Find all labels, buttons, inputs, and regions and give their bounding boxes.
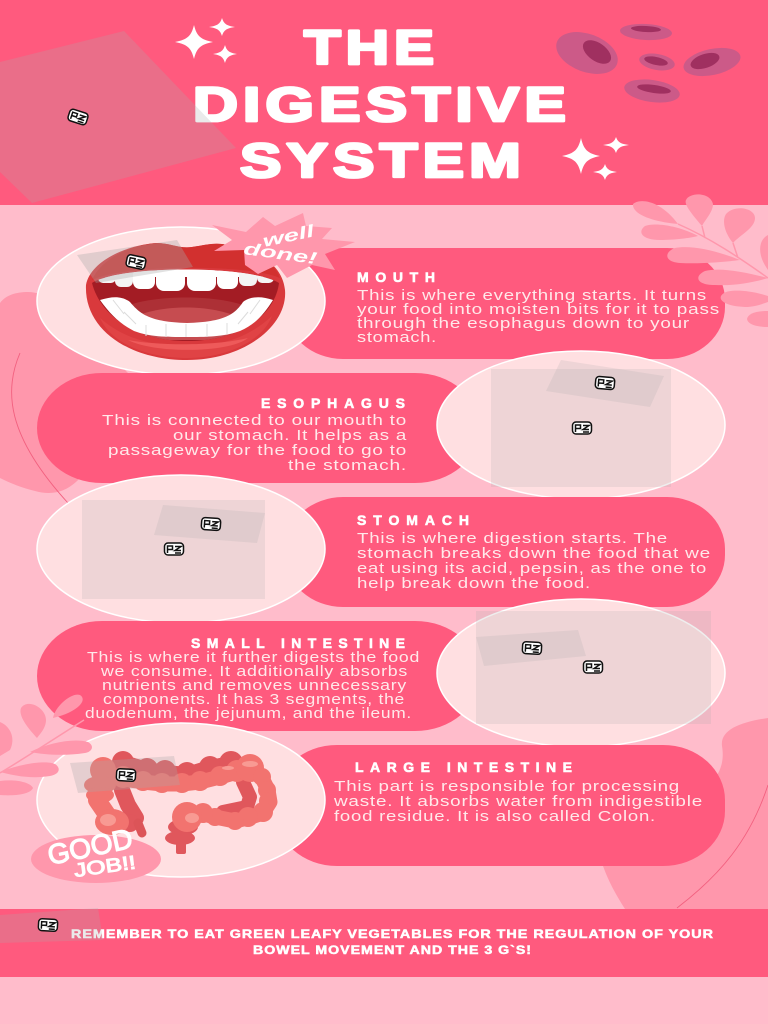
large intestine image circle [37, 723, 325, 877]
footer message [71, 929, 714, 957]
mouth heading: MOUTH [357, 269, 435, 285]
large intestine text pill [275, 745, 725, 866]
stomach description [357, 531, 711, 592]
small intestine text pill [37, 621, 480, 731]
colon dark back layer [123, 764, 231, 776]
illustration: mouth [86, 243, 285, 360]
badge: good job: GOOD [45, 823, 135, 871]
title [193, 22, 571, 188]
small intestine description: This is where it further digests the food [87, 650, 420, 666]
placeholder: mouth image [77, 240, 193, 283]
title: THE [304, 22, 439, 75]
decorative blob: left [0, 292, 140, 503]
stomach description: eat using its acid, pepsin, as the one to [357, 561, 707, 577]
small intestine description: duodenum, the jejunum, and the ileum. [85, 706, 412, 722]
title: SYSTEM [240, 135, 526, 188]
badge: good job: JOB!! [73, 853, 137, 882]
mouth description: This is where everything starts. It turns [357, 288, 707, 304]
mouth description: through the esophagus down to your [357, 316, 690, 332]
decorative blob: right [603, 718, 768, 909]
esophagus description: This is connected to our mouth to [102, 413, 407, 429]
stomach description: This is where digestion starts. The [357, 531, 668, 547]
mouth description: stomach. [357, 330, 437, 346]
placeholder: header image [0, 31, 236, 203]
small intestine description: we consume. It additionally absorbs [100, 664, 408, 680]
badge: well done: done! [242, 239, 319, 268]
stomach image circle [37, 475, 325, 623]
mouth image circle [37, 227, 325, 375]
footer message: REMEMBER TO EAT GREEN LEAFY VEGETABLES FOR THE REGULATION OF YOUR [71, 929, 714, 941]
small intestine heading: SMALL INTESTINE [191, 635, 405, 651]
panel: stomach [37, 475, 725, 623]
upper teeth [98, 270, 274, 291]
panel: large intestine [37, 723, 725, 877]
colon light front layer [103, 770, 270, 821]
esophagus description: our stomach. It helps as a [173, 428, 407, 444]
decorative leaves: bottom left [0, 695, 92, 795]
panel: esophagus [37, 351, 725, 499]
small intestine description [85, 650, 420, 722]
small intestine description: components. It has 3 segments, the [103, 692, 405, 708]
esophagus image circle [437, 351, 725, 499]
badge: good job [31, 823, 161, 883]
large intestine heading: LARGE INTESTINE [355, 759, 572, 775]
small intestine image circle [437, 599, 725, 747]
title: DIGESTIVE [193, 79, 571, 132]
icon: blood cells [550, 23, 743, 106]
lower teeth [100, 297, 273, 337]
small intestine description: nutrients and removes unnecessary [102, 678, 407, 694]
panel: small intestine [37, 599, 725, 747]
esophagus description [102, 413, 407, 474]
stomach text pill [285, 497, 725, 607]
icon: sparkles left [175, 18, 237, 63]
badge: well done: well [261, 221, 318, 251]
header band [0, 0, 768, 205]
icon: sparkles right [562, 137, 629, 180]
stomach heading: STOMACH [357, 512, 469, 528]
large intestine description [333, 779, 703, 825]
large intestine description: food residue. It is also called Colon. [334, 809, 656, 825]
large intestine description: waste. It absorbs water from indigestible [333, 794, 703, 810]
stomach description: stomach breaks down the food that we [357, 546, 711, 562]
esophagus text pill [37, 373, 480, 483]
panel: mouth [37, 227, 725, 375]
stomach description: help break down the food. [357, 576, 591, 592]
esophagus description: passageway for the food to go to [108, 443, 407, 459]
footer band [0, 908, 768, 977]
mouth text pill [285, 248, 725, 359]
footer message: BOWEL MOVEMENT AND THE 3 G`S! [253, 945, 532, 957]
placeholder: large intestine image [70, 756, 180, 793]
illustration: large intestine [84, 751, 277, 854]
placeholder: small intestine image [476, 611, 711, 724]
mouth description [357, 288, 720, 346]
mouth description: your food into moisten bits for it to pass [357, 302, 720, 318]
large intestine description: This part is responsible for processing [334, 779, 680, 795]
colon highlights [100, 761, 258, 826]
decorative leaves: top right [633, 194, 768, 327]
placeholder: stomach image [82, 500, 265, 599]
badge: well done [212, 213, 355, 278]
placeholder: esophagus image [491, 360, 671, 487]
esophagus heading: ESOPHAGUS [261, 395, 405, 411]
placeholder: footer image [0, 908, 103, 943]
esophagus description: the stomach. [288, 458, 407, 474]
